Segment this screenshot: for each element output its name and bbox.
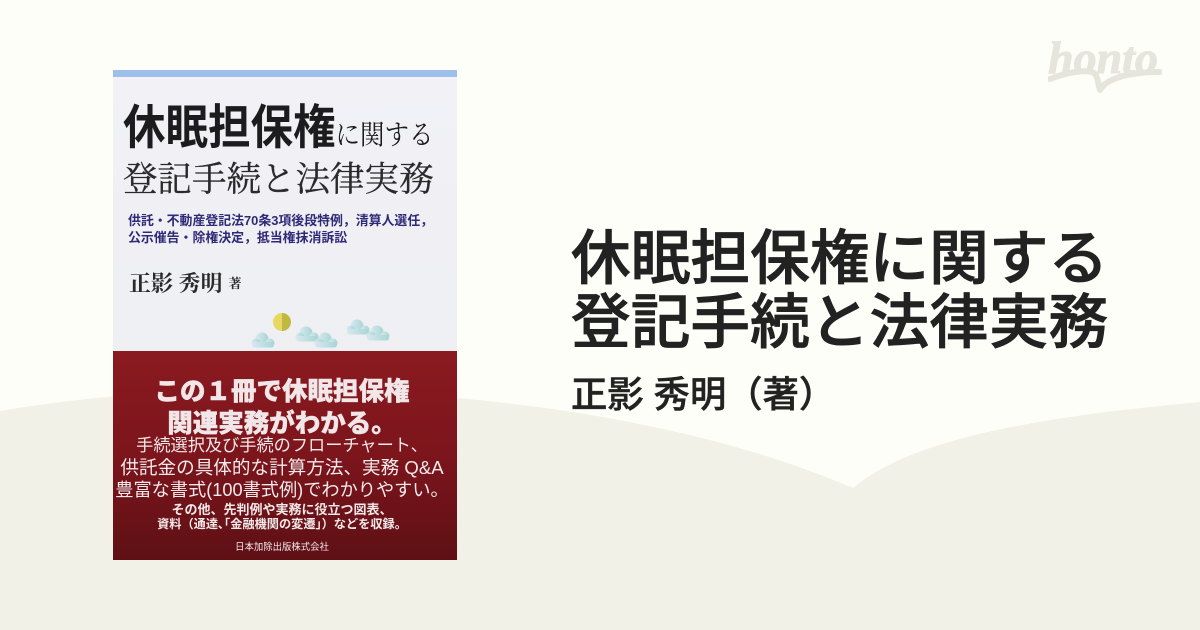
book title: [571, 225, 1108, 356]
cover description: 手続選択及び手続のフローチャート、: [136, 435, 428, 455]
cover note: その他、先判例や実務に役立つ図表、: [171, 502, 392, 517]
cover headline: 関連実務がわかる。: [167, 410, 397, 438]
cover note: [157, 502, 407, 530]
illustration: sun and clouds: [252, 313, 390, 348]
cover description: 豊富な書式(100書式例)でわかりやすい。: [115, 480, 449, 500]
cover description: [115, 435, 449, 500]
cover title line 1: 休眠担保権に関する: [123, 103, 434, 155]
cover headline: [154, 378, 410, 438]
cover red panel: [113, 351, 457, 560]
book cover: [113, 70, 457, 560]
cover publisher: 日本加除出版株式会社: [235, 541, 329, 552]
cover top stripe: [113, 70, 457, 77]
cover title line 2: 登記手続と法律実務: [123, 151, 434, 201]
logo: honto: honto: [1048, 32, 1158, 83]
cover author: 正影 秀明 著: [129, 267, 242, 298]
cover headline: この１冊で休眠担保権: [154, 378, 410, 406]
book title: 登記手続と法律実務: [571, 289, 1108, 356]
cover subtitle: 公示催告・除権決定，抵当権抹消訴訟: [128, 230, 347, 245]
cover subtitle: 供託・不動産登記法70条3項後段特例，清算人選任，: [128, 213, 433, 228]
book title: 休眠担保権に関する: [571, 225, 1108, 292]
cover note: 資料（通達､｢金融機関の変遷｣）などを収録。: [157, 516, 407, 530]
book author: 正影 秀明（著）: [571, 374, 835, 415]
cover description: 供託金の具体的な計算方法、実務 Q&A: [120, 456, 444, 478]
cover subtitle: [128, 213, 433, 245]
